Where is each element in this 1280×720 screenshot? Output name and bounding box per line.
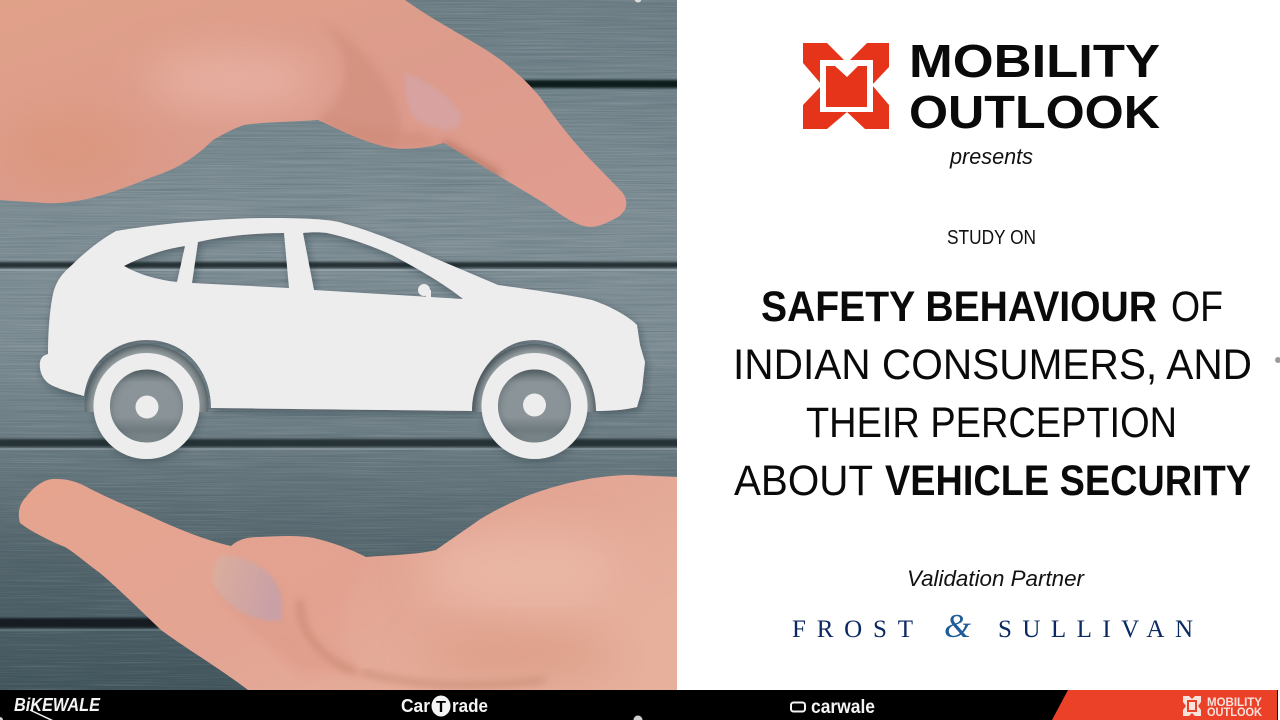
wheel arch shadows	[84, 344, 596, 412]
main title: SAFETY BEHAVIOUR	[761, 283, 1157, 331]
logo: Mobility Outlook	[803, 35, 1160, 138]
wood plank background	[0, 0, 690, 690]
logo: Frost and Sullivan: &	[944, 608, 972, 645]
main title: OF	[1171, 283, 1223, 331]
validation partner label: Validation Partner	[907, 566, 1086, 591]
logo: Frost and Sullivan: SULLIVAN	[998, 616, 1193, 643]
footer bar	[0, 690, 1278, 720]
logo: Frost and Sullivan	[792, 608, 1193, 645]
main title: ABOUT	[734, 457, 873, 505]
footer Mobility Outlook logo: OUTLOOK	[1207, 707, 1263, 719]
footer Mobility Outlook logo: MOBILITY	[1207, 697, 1262, 709]
CarTrade logo: T	[436, 699, 446, 716]
mirror	[418, 284, 431, 298]
CarTrade logo	[401, 696, 488, 716]
car body	[40, 218, 645, 411]
logo: Frost and Sullivan: FROST	[792, 616, 913, 643]
photo panel: hands protecting car on wood	[0, 0, 690, 690]
hand: bottom	[0, 470, 677, 690]
logo wordmark	[909, 35, 1160, 138]
presents line: presents	[949, 144, 1033, 169]
logo wordmark: MOBILITY	[909, 35, 1160, 87]
BikeWale logo: BiKEWALE	[14, 695, 101, 715]
CarTrade logo: rade	[452, 696, 488, 716]
main title	[733, 283, 1252, 505]
front wheel	[490, 361, 580, 454]
red footer tab	[1052, 690, 1277, 720]
rear wheel	[102, 361, 192, 454]
logo icon	[803, 43, 889, 129]
main title: INDIAN CONSUMERS, AND	[733, 341, 1252, 389]
car silhouette	[40, 218, 645, 468]
CarTrade logo: Car	[401, 696, 430, 716]
main title: THEIR PERCEPTION	[806, 399, 1177, 447]
logo wordmark: OUTLOOK	[909, 86, 1160, 138]
study on label: STUDY ON	[947, 227, 1036, 249]
hand: top	[0, 0, 640, 240]
footer Mobility Outlook logo	[1183, 696, 1263, 719]
CarWale logo: carwale	[811, 697, 875, 718]
